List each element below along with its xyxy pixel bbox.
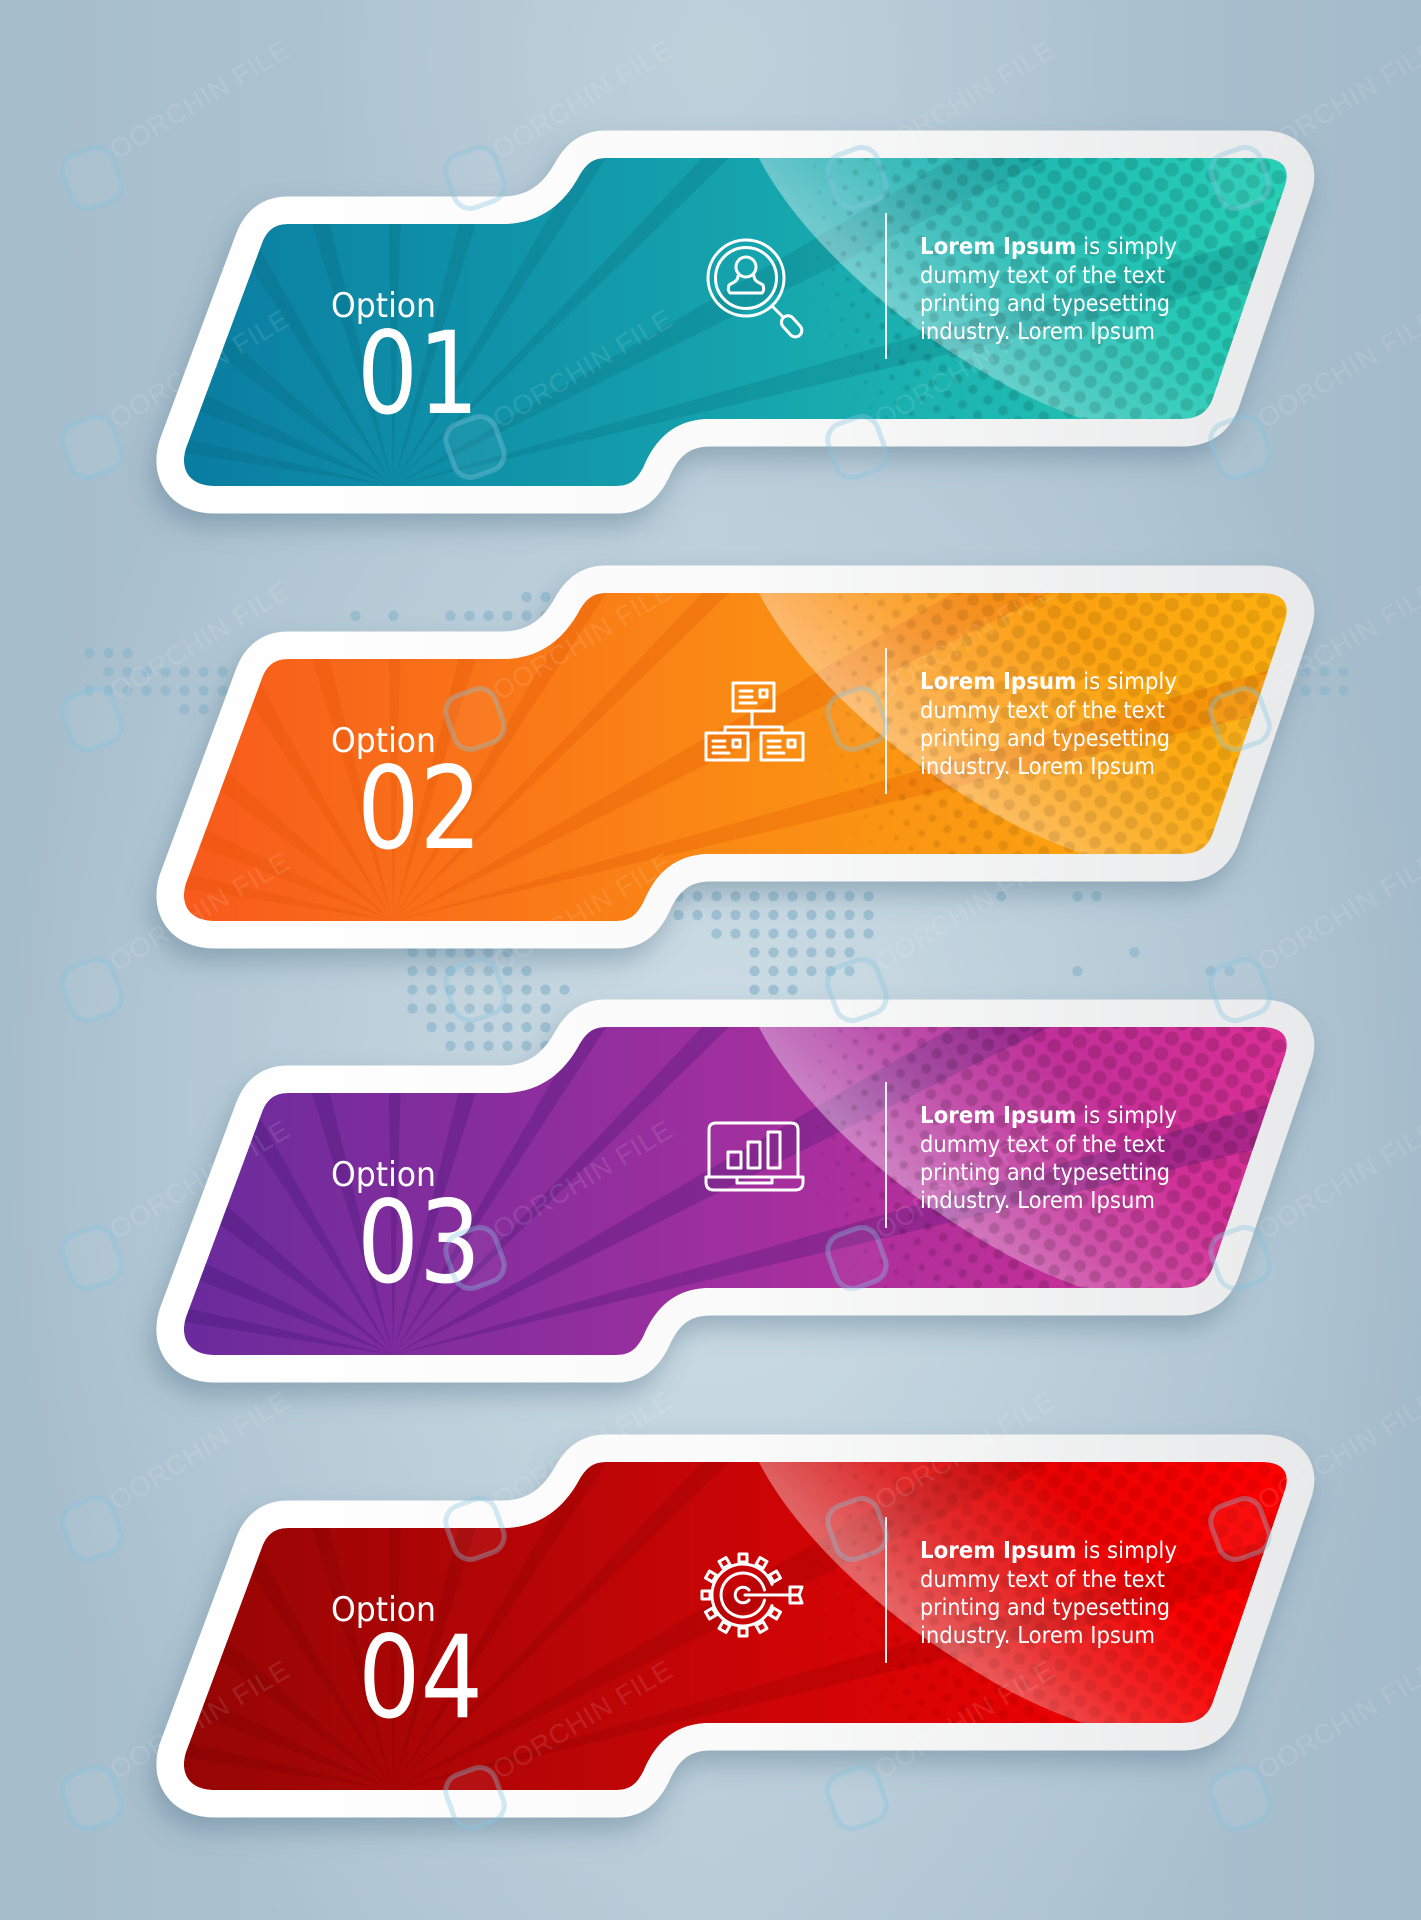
card 3: option 03 purple [142,1000,1318,1407]
card 3 white frame [184,1027,1287,1355]
watermark text: OORCHIN FILE [488,1385,678,1516]
card 3 colour panel [184,1027,1287,1355]
watermark text: OORCHIN FILE [105,34,295,165]
card 3 number: 03 [357,1176,481,1309]
card 3 label: Option [331,1155,436,1195]
card 1 text block: Lorem Ipsum is simply [920,234,1177,260]
watermark text: OORCHIN FILE [105,1114,295,1245]
watermark text: OORCHIN FILE [488,34,678,165]
card 1 number: 01 [357,307,479,440]
card 2 text block: dummy text of the text [920,698,1165,724]
watermark text: OORCHIN FILE [870,1654,1060,1785]
card 4 white frame [184,1462,1287,1790]
card 4 divider [885,1517,887,1663]
watermark text: OORCHIN FILE [870,846,1060,977]
card 2 divider [885,648,887,794]
card 1 text block: dummy text of the text [920,263,1165,289]
card 1 text block: printing and typesetting [920,291,1170,317]
card 2 text block [920,669,1177,780]
watermark text: OORCHIN FILE [870,1114,1060,1245]
card 3 text block: printing and typesetting [920,1160,1170,1186]
card 3 text block [920,1103,1177,1214]
watermark text: OORCHIN FILE [870,575,1060,706]
card 1 colour panel [184,158,1287,486]
watermark text: OORCHIN FILE [870,1385,1060,1516]
card 2 white frame [184,593,1287,921]
card 1 white frame [184,158,1287,486]
card 2 text block: printing and typesetting [920,726,1170,752]
card 4 text block: dummy text of the text [920,1567,1165,1593]
card 2 label: Option [331,721,436,761]
card 1 text block [920,234,1177,345]
card 4 label: Option [331,1590,436,1630]
card 4 number: 04 [358,1611,483,1744]
watermark text: OORCHIN FILE [488,1114,678,1245]
watermark text: OORCHIN FILE [105,1385,295,1516]
icon: laptop with bar chart [706,1123,803,1190]
card 1: option 01 teal [142,130,1318,538]
icon: gear target with arrow [702,1554,802,1636]
card 4 colour panel [184,1462,1287,1790]
watermark text: OORCHIN FILE [105,1654,295,1785]
card 4 text block: Lorem Ipsum is simply [920,1538,1177,1564]
watermark text: OORCHIN FILE [488,1654,678,1785]
card 2 number: 02 [357,742,482,875]
watermark text: OORCHIN FILE [105,846,295,977]
card 2 text block: industry. Lorem Ipsum [920,754,1155,780]
card 2 colour panel [184,593,1287,921]
card 1 text block: industry. Lorem Ipsum [920,319,1155,345]
card 3 text block: industry. Lorem Ipsum [920,1188,1155,1214]
watermark text: OORCHIN FILE [105,303,295,434]
card 4: option 04 red [142,1434,1318,1842]
watermark text: OORCHIN FILE [870,303,1060,434]
card 4 text block: printing and typesetting [920,1595,1170,1621]
watermark text: OORCHIN FILE [105,575,295,706]
watermark text: OORCHIN FILE [870,34,1060,165]
watermark text: OORCHIN FILE [488,303,678,434]
watermark logos [58,143,1274,1833]
icon: magnifier with person [708,240,804,340]
world map dots [80,588,1353,1055]
card 3 text block: dummy text of the text [920,1132,1165,1158]
card 3 divider [885,1082,887,1228]
card 2: option 02 orange [142,566,1318,974]
card 1 label: Option [331,286,436,326]
card 4 text block: industry. Lorem Ipsum [920,1623,1155,1649]
watermark text: OORCHIN FILE [488,846,678,977]
card 4 text block [920,1538,1177,1649]
watermark text: OORCHIN FILE [488,575,678,706]
icon: organisation chart [706,683,803,760]
card 2 text block: Lorem Ipsum is simply [920,669,1177,695]
card 1 divider [885,213,887,359]
card 3 text block: Lorem Ipsum is simply [920,1103,1177,1129]
